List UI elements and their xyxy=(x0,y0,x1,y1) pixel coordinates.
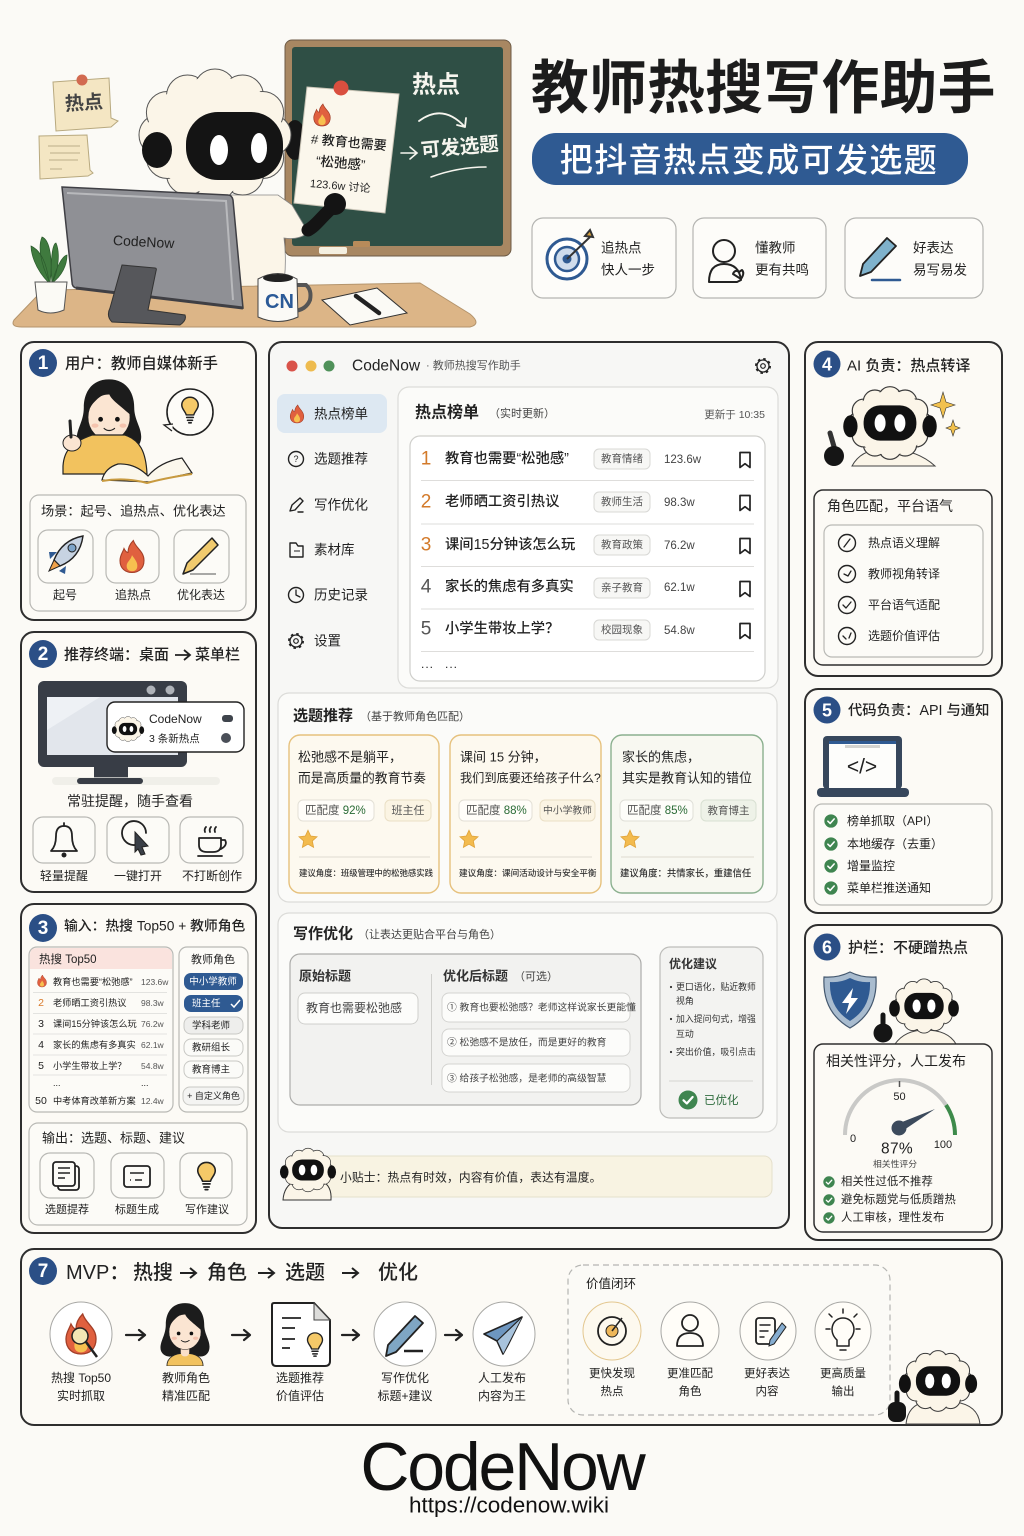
sub panel: checklist xyxy=(814,804,992,905)
sub panel: relevance: 人工审核，理性发布 xyxy=(841,1210,944,1224)
step 1 xyxy=(50,1302,112,1403)
feature card: 懂教师 xyxy=(693,218,826,298)
label: 轻量提醒 xyxy=(40,868,88,883)
list: hot top 50: 中考体育改革新方案 xyxy=(53,1095,136,1106)
title: 教师热搜写作助手 xyxy=(531,57,996,121)
heading: 热搜 xyxy=(133,1261,173,1284)
chalk arrow 2 xyxy=(401,147,417,159)
badge 6: 6 xyxy=(822,938,832,958)
heading: 推荐终端：桌面 xyxy=(64,646,169,664)
label: 追热点 xyxy=(115,587,151,602)
gauge xyxy=(845,1080,955,1169)
row 1: 1 xyxy=(421,448,431,470)
sub panel: outputs: 输出：选题、标题、建议 xyxy=(42,1130,185,1146)
sub panel: relevance: 相关性评分，人工发布 xyxy=(826,1053,966,1069)
badge 5: 5 xyxy=(822,700,832,720)
topic card 1: 松弛感不是躺平， xyxy=(298,750,402,764)
list: teacher roles: 班主任 xyxy=(192,998,221,1010)
value loop: 价值闭环 xyxy=(586,1276,636,1291)
row 2: 2 xyxy=(421,492,431,512)
suggestions box xyxy=(660,947,763,1118)
list: hot top 50: 4 xyxy=(38,1039,44,1051)
feature card: 好表达 xyxy=(845,218,983,298)
list: hot top 50: ... xyxy=(53,1078,61,1088)
sub panel: relevance: 避免标题党与低质蹭热 xyxy=(841,1192,956,1206)
speech bubble with bulb xyxy=(164,389,213,435)
sub panel: checklist: 榜单抓取（API） xyxy=(847,813,938,828)
list: hot top 50: 12.4w xyxy=(141,1096,165,1106)
icon: person xyxy=(709,240,743,282)
illustration: desktop with menu bar popup xyxy=(38,681,244,785)
logo: CodeNow xyxy=(360,1429,647,1505)
badge 7 xyxy=(29,1257,57,1285)
paper note: 123.6w 讨论 xyxy=(309,176,371,195)
row 1: 123.6w xyxy=(664,454,702,466)
label: 写作建议 xyxy=(185,1202,229,1216)
suggestions box: 优化建议 xyxy=(669,956,717,971)
arrow xyxy=(232,1330,250,1340)
panel 1: user xyxy=(21,342,256,620)
illustration: robot sheep xyxy=(824,387,960,466)
row 4: 亲子教育 xyxy=(601,581,643,594)
suggestions box: 已优化 xyxy=(704,1093,739,1107)
list: hot top 50: 小学生带妆上学？ xyxy=(53,1060,126,1071)
panel: writing optimisation: （让表达更贴合平台与角色） xyxy=(358,927,501,941)
list: hot top 50: 教育也需要“松弛感” xyxy=(53,976,133,987)
icon: bell xyxy=(33,817,95,863)
list: teacher roles: 中小学教师 xyxy=(189,976,237,988)
heading: 菜单栏 xyxy=(195,646,240,664)
label: 一键打开 xyxy=(114,869,162,883)
topic card 3: 匹配度 85% xyxy=(627,803,688,817)
heading: 护栏：不硬蹭热点 xyxy=(848,938,968,956)
badge 2: 2 xyxy=(38,644,48,665)
compare box: 优化后标题 xyxy=(443,968,508,984)
tip bar xyxy=(280,1148,772,1200)
arrow xyxy=(126,1330,145,1340)
row 5 xyxy=(421,618,750,640)
loop item 2 xyxy=(661,1302,719,1398)
row 1: 教育情绪 xyxy=(601,452,643,465)
url: https://codenow.wiki xyxy=(409,1492,609,1518)
arrow xyxy=(342,1330,359,1340)
robot sheep ear back xyxy=(284,120,306,160)
label: 起号 xyxy=(53,588,77,602)
sub panel: role match: 热点语义理解 xyxy=(868,536,940,550)
feature card: 好表达: 易写易发 xyxy=(913,262,967,278)
panel: writing optimisation xyxy=(278,913,777,1132)
row 4: 4 xyxy=(421,576,432,598)
list: teacher roles: 教师角色 xyxy=(191,952,235,966)
loop item 2: 更准匹配 xyxy=(667,1367,713,1380)
gauge: 0 xyxy=(850,1133,856,1145)
loop item 1: 热点 xyxy=(600,1385,624,1398)
nav: 素材库: 素材库 xyxy=(314,542,354,558)
step 3: 选题推荐 xyxy=(276,1371,324,1385)
panel: hot list: （实时更新） xyxy=(489,406,555,420)
row 4: 家长的焦虑有多真实 xyxy=(445,577,574,595)
sticky note: lines xyxy=(39,135,93,179)
chalk text: 热点: 热点 xyxy=(412,72,460,98)
icon: bulb xyxy=(180,1153,232,1198)
monitor xyxy=(62,187,243,325)
panel: hot list xyxy=(398,387,778,688)
suggestions box: 突出价值，吸引点击 xyxy=(676,1046,756,1057)
list: hot top 50: 家长的焦虑有多真实 xyxy=(53,1039,136,1050)
feature card: 懂教师: 懂教师 xyxy=(755,240,796,256)
topic card 2: 匹配度 88% xyxy=(466,803,527,817)
panel 4: AI xyxy=(805,342,1002,676)
icon: laptop: </> xyxy=(847,756,877,778)
list: teacher roles xyxy=(179,947,248,1112)
compare box: ① 教育也要松弛感？老师这样说家长更能懂 xyxy=(447,1000,636,1014)
label: 不打断创作 xyxy=(182,868,242,883)
row 2: 98.3w xyxy=(664,497,695,509)
badge 4: 4 xyxy=(822,354,832,374)
row 2: 教师生活 xyxy=(601,495,643,508)
icon: pen xyxy=(860,238,900,280)
panel 2: terminals xyxy=(21,632,256,892)
topic card 2: 课间 15 分钟， xyxy=(460,750,547,764)
panel: topic recommendations: （基于教师角色匹配） xyxy=(360,709,470,723)
illustration: robot sheep xyxy=(874,979,959,1044)
step 5: 内容为王 xyxy=(478,1388,526,1403)
feature card: 追热点: 快人一步 xyxy=(601,262,655,278)
row ellipsis: ... xyxy=(421,657,434,671)
gauge: 相关性评分 xyxy=(873,1158,917,1169)
panel: writing optimisation: 写作优化 xyxy=(293,924,353,942)
loop item 4: 更高质量 xyxy=(820,1366,866,1380)
nav: 写作优化 xyxy=(290,498,368,512)
loop item 1: 更快发现 xyxy=(589,1366,635,1380)
sub panel: checklist: 增量监控 xyxy=(847,859,895,873)
list: hot top 50: 76.2w xyxy=(141,1019,165,1029)
suggestions box: 更口语化，贴近教师 xyxy=(676,981,756,992)
compare box: ③ 给孩子松弛感，是老师的高级智慧 xyxy=(447,1072,607,1084)
list: hot top 50: 98.3w xyxy=(141,998,165,1008)
heading: 代码负责：API 与通知 xyxy=(848,702,989,719)
suggestions box: 视角 xyxy=(676,995,694,1006)
list: hot top 50 xyxy=(29,947,173,1112)
topic card 1: 而是高质量的教育节奏 xyxy=(298,770,426,786)
icon: laptop xyxy=(817,736,909,797)
badge 2 xyxy=(29,640,57,668)
feature card: 懂教师: 更有共鸣 xyxy=(755,262,809,278)
list: teacher roles: + 自定义角色 xyxy=(187,1090,240,1101)
row 5: 小学生带妆上学？ xyxy=(445,619,559,637)
nav: 历史记录 xyxy=(288,588,368,602)
badge 3 xyxy=(29,914,57,942)
list: hot top 50: 课间15分钟该怎么玩 xyxy=(53,1018,137,1029)
loop item 3 xyxy=(740,1302,796,1398)
sidebar xyxy=(277,394,387,648)
badge 1: 1 xyxy=(38,353,49,374)
sub panel: role match: 角色匹配，平台语气 xyxy=(827,498,953,514)
heading: AI 负责：热点转译 xyxy=(847,356,970,374)
sticky note: 热点 xyxy=(53,74,118,131)
nav: 设置: 设置 xyxy=(314,634,341,648)
paper note xyxy=(294,80,399,213)
panel: topic recommendations: 选题推荐 xyxy=(293,708,353,724)
step 1: 热搜 Top50 xyxy=(51,1370,111,1385)
step 3 xyxy=(272,1303,330,1403)
robot arm xyxy=(308,206,334,230)
mug: CN xyxy=(265,291,294,313)
panel: hot list: 更新于 10:35 xyxy=(704,408,765,421)
subtitle pill xyxy=(532,133,968,185)
row 5: 54.8w xyxy=(664,625,695,637)
desk xyxy=(13,283,476,327)
tip bar: 小贴士：热点有时效，内容有价值，表达有温度。 xyxy=(340,1170,602,1184)
loop item 4 xyxy=(815,1302,871,1398)
sub panel: role match: 教师视角转译 xyxy=(868,566,940,581)
sub panel: scenes: 场景：起号、追热点、优化表达 xyxy=(41,504,226,518)
robot sheep body xyxy=(222,195,308,295)
topic card 3: 教育博主 xyxy=(708,804,750,817)
nav: 选题推荐: ? xyxy=(293,454,299,464)
illustration: teacher reading xyxy=(63,379,192,483)
value loop xyxy=(568,1265,890,1415)
row 3: 3 xyxy=(421,534,431,556)
loop item 4: 输出 xyxy=(832,1384,854,1398)
chalk text: 可发选题: 可发选题 xyxy=(420,132,500,162)
list: hot top 50: 5 xyxy=(38,1060,44,1072)
badge 3: 3 xyxy=(38,918,48,939)
badge 1 xyxy=(29,349,57,377)
panel 7: MVP xyxy=(21,1249,1002,1425)
topic card 2: 建议角度：课间活动设计与安全平衡 xyxy=(459,867,597,878)
step 5: 人工发布 xyxy=(478,1370,526,1385)
sub panel: checklist: 本地缓存（去重） xyxy=(847,837,943,851)
icon: coffee xyxy=(180,817,243,863)
window title bar: · 教师热搜写作助手 xyxy=(426,358,521,372)
heading: MVP： xyxy=(66,1262,129,1284)
heading: 用户：教师自媒体新手 xyxy=(65,356,218,372)
row 4: 62.1w xyxy=(664,582,695,594)
subtitle pill: 把抖音热点变成可发选题 xyxy=(560,142,938,178)
topic card 2 xyxy=(450,735,601,893)
row 2 xyxy=(421,492,750,512)
step 5 xyxy=(473,1302,535,1403)
list: teacher roles: 教育博主 xyxy=(192,1064,230,1076)
panel: hot list: 热点榜单 xyxy=(415,402,479,422)
gauge: 100 xyxy=(934,1139,952,1151)
topic card 2: 我们到底要还给孩子什么? xyxy=(460,770,601,785)
topic card 1: 匹配度 92% xyxy=(305,803,366,817)
row 3: 76.2w xyxy=(664,540,695,552)
badge 7: 7 xyxy=(38,1261,48,1282)
illustration: robot sheep thumbs up xyxy=(888,1351,980,1424)
gauge: 50 xyxy=(893,1091,906,1103)
compare box xyxy=(290,954,641,1105)
badge 4 xyxy=(814,350,840,378)
topic card 1: 建议角度：班级管理中的松弛感实践 xyxy=(299,868,434,878)
topic card 3 xyxy=(611,735,763,893)
robot sheep head xyxy=(139,69,291,201)
chalkboard xyxy=(285,40,511,256)
topic card 3: 其实是教育认知的错位 xyxy=(622,770,752,786)
window title bar: CodeNow xyxy=(352,358,421,374)
icon: target xyxy=(547,230,593,279)
nav: 设置 xyxy=(289,634,341,648)
step 2 xyxy=(160,1303,210,1403)
nav: 热点榜单 xyxy=(290,405,368,423)
window title bar xyxy=(286,358,770,374)
gauge: 87% xyxy=(881,1140,913,1158)
panel: hot list: ... xyxy=(445,657,458,671)
heading: 输入：热搜 Top50 + 教师角色 xyxy=(64,918,246,934)
list: hot top 50: 123.6w xyxy=(141,977,169,987)
icon: title card xyxy=(111,1153,164,1198)
step 4: 标题+建议 xyxy=(377,1389,433,1403)
topic card 3: 家长的焦虑， xyxy=(622,750,700,764)
step 2: 教师角色 xyxy=(162,1370,210,1385)
arrow xyxy=(445,1330,462,1340)
row 3: 教育政策 xyxy=(601,538,643,551)
nav: 热点榜单: 热点榜单 xyxy=(314,406,368,422)
sub panel: outputs xyxy=(29,1123,247,1225)
loop item 2: 角色 xyxy=(678,1384,702,1398)
nav: 写作优化: 写作优化 xyxy=(314,498,368,512)
icon: flame xyxy=(106,530,159,583)
nav: 历史记录: 历史记录 xyxy=(314,588,368,602)
panel: topic recommendations xyxy=(278,693,777,902)
topic card 2: 中小学教师 xyxy=(543,804,592,816)
step 2: 精准匹配 xyxy=(162,1389,210,1403)
loop item 3: 更好表达 xyxy=(744,1366,790,1380)
list: teacher roles: 教研组长 xyxy=(192,1042,231,1054)
row 1: 教育也需要“松弛感” xyxy=(445,449,569,467)
chalk arrow xyxy=(419,113,466,127)
list: hot top 50: 62.1w xyxy=(141,1040,165,1050)
panel 5: code xyxy=(805,689,1002,913)
list: hot top 50: 50 xyxy=(35,1095,47,1107)
sub panel: relevance xyxy=(814,1044,992,1232)
heading: 选题 xyxy=(285,1261,325,1284)
paper note: # 教育也需要 xyxy=(310,132,387,153)
loop item 1 xyxy=(583,1302,641,1398)
list: hot top 50: ... xyxy=(141,1078,149,1088)
row 1 xyxy=(421,448,750,470)
list: hot top 50: 3 xyxy=(38,1018,44,1030)
list: hot top 50: 54.8w xyxy=(141,1061,165,1071)
label: 选题提荐 xyxy=(45,1203,89,1216)
monitor logo: CodeNow xyxy=(113,232,176,251)
icon: documents xyxy=(40,1153,94,1198)
icon: cursor xyxy=(107,817,169,863)
compare box: （可选） xyxy=(514,970,558,983)
row 5: 校园现象 xyxy=(601,623,643,636)
plant xyxy=(31,237,67,313)
nav: 素材库 xyxy=(290,542,354,558)
badge 5 xyxy=(814,696,840,724)
header illustration xyxy=(13,40,511,327)
sub panel: checklist: 菜单栏推送通知 xyxy=(847,880,931,895)
icon: rocket xyxy=(38,530,93,583)
paper note: “松弛感” xyxy=(315,153,366,173)
compare box: 原始标题 xyxy=(299,968,351,984)
caption: 常驻提醒，随手查看 xyxy=(67,793,193,809)
list: teacher roles: 学科老师 xyxy=(192,1020,230,1032)
sticky note: 热点: 热点 xyxy=(64,91,104,115)
topic card 1: 班主任 xyxy=(392,804,424,817)
step 1: 实时抓取 xyxy=(57,1388,105,1403)
label: 标题生成 xyxy=(115,1202,159,1216)
row 4 xyxy=(421,576,750,598)
compare box: 教育也需要松弛感 xyxy=(306,1000,402,1015)
suggestions box: 互动 xyxy=(676,1029,694,1039)
topic card 3: 建议角度：共情家长，重建信任 xyxy=(620,868,751,878)
heading: 优化 xyxy=(378,1261,418,1284)
feature card: 追热点: 追热点 xyxy=(601,240,642,256)
nav: 选题推荐 xyxy=(288,452,368,466)
panel 3: inputs xyxy=(21,904,256,1233)
sub panel: scenes xyxy=(30,495,246,611)
list: hot top 50: 热搜 Top50 xyxy=(39,952,97,966)
loop item 3: 内容 xyxy=(756,1384,779,1398)
heading xyxy=(66,1261,418,1284)
app window xyxy=(269,342,789,1228)
topic card 1 xyxy=(289,735,439,893)
popup: 3 条新热点 xyxy=(149,732,200,745)
heading: 角色 xyxy=(207,1261,247,1284)
step 4: 写作优化 xyxy=(381,1371,429,1385)
feature card: 好表达: 好表达 xyxy=(913,240,954,256)
mug xyxy=(258,274,310,322)
popup: CodeNow xyxy=(149,712,202,726)
feature card: 追热点 xyxy=(532,218,676,298)
nav: 选题推荐: 选题推荐 xyxy=(314,452,368,466)
notebook and pen xyxy=(322,288,407,325)
badge 6 xyxy=(814,934,840,960)
label: 优化表达 xyxy=(177,588,225,602)
row 3 xyxy=(421,534,750,556)
compare box: ② 松弛感不是放任，而是更好的教育 xyxy=(447,1036,607,1048)
step 3: 价值评估 xyxy=(276,1388,324,1403)
panel 6: guardrails xyxy=(805,925,1002,1240)
step 4 xyxy=(374,1302,436,1403)
row 3: 课间15分钟该怎么玩 xyxy=(445,535,575,553)
sub panel: role match: 选题价值评估 xyxy=(868,628,940,643)
list: hot top 50: 老师晒工资引热议 xyxy=(53,997,126,1008)
suggestions box: 加入提问句式，增强 xyxy=(676,1013,756,1024)
sub panel: relevance: 相关性过低不推荐 xyxy=(841,1174,933,1188)
list: hot top 50: 2 xyxy=(38,997,44,1009)
icon: pencil xyxy=(174,530,229,583)
icon: shield xyxy=(824,972,876,1028)
row 2: 老师晒工资引热议 xyxy=(445,492,559,510)
sub panel: role match: 平台语气适配 xyxy=(868,597,940,612)
popup xyxy=(107,702,244,752)
row 5: 5 xyxy=(421,618,431,640)
sub panel: role match xyxy=(814,490,992,665)
heading xyxy=(64,646,240,664)
